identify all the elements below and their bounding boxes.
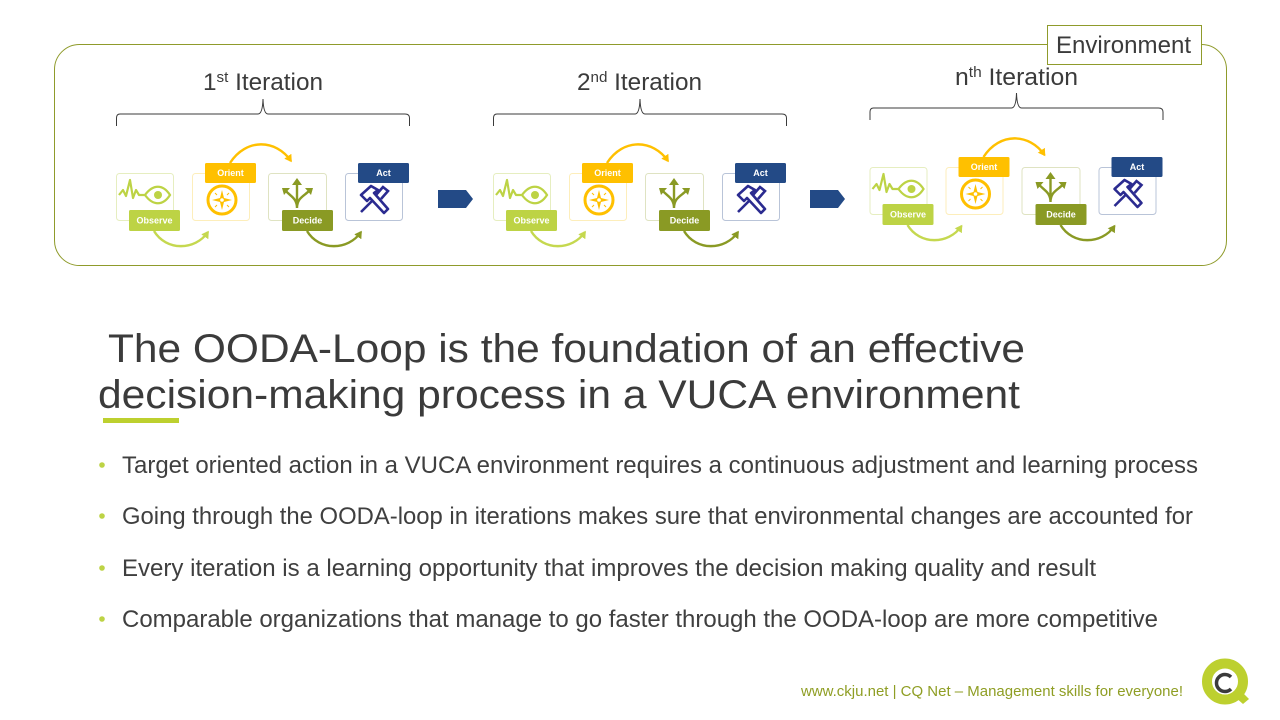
title [98,327,1025,417]
heading: 1st iteration: Iteration [228,69,323,96]
diagram: nth OODA loop [870,138,1162,240]
bullet list: Going through the OODA-loop in iterations makes sure that environmental changes are accounted for [122,503,1193,530]
title: The OODA-Loop is the foundation of an effective [108,327,1025,371]
heading: nth iteration: n [955,64,968,91]
bracket: nth iteration [870,93,1163,120]
heading: nth iteration: th [969,64,982,81]
heading: nth iteration: Iteration [982,64,1078,91]
bracket: 2nd iteration [494,99,786,126]
diagram: 1st OODA loop: Act [376,168,391,178]
bullet list [99,452,1198,633]
diagram: nth OODA loop: Observe [890,210,926,220]
diagram: 2nd OODA loop [494,144,786,246]
heading: 1st iteration: 1 [203,69,216,96]
diagram: 2nd OODA loop: Orient [594,168,621,178]
bullet list: Comparable organizations that manage to go faster through the OODA-loop are more competitive [122,606,1158,633]
diagram: 1st OODA loop: Observe [136,216,173,226]
bullet list: Target oriented action in a VUCA environment requires a continuous adjustment and learning process [122,452,1198,479]
panel: environment [54,26,1226,266]
arrow: to 2nd iteration [438,190,473,208]
diagram: nth OODA loop: Orient [971,162,997,172]
diagram: 2nd OODA loop: Act [753,168,768,178]
arrow: to nth iteration [810,190,845,208]
title: decision-making process in a VUCA environment [98,373,1020,417]
diagram: 1st OODA loop [116,144,409,246]
diagram: 1st OODA loop: Decide [293,216,322,226]
title underline [103,418,179,423]
heading: 2nd iteration: 2 [577,69,590,96]
diagram: 2nd OODA loop: Decide [670,216,699,226]
diagram: nth OODA loop: Act [1130,162,1144,172]
footer text: www.ckju.net | CQ Net – Management skills for everyone! [800,684,1183,700]
heading: 1st iteration: st [217,69,229,86]
bullet list: Every iteration is a learning opportunity that improves the decision making quality and result [122,555,1096,582]
diagram: nth OODA loop: Decide [1046,210,1076,220]
heading: 2nd iteration: Iteration [607,69,702,96]
label: environment [1048,26,1202,64]
label: environment: Environment [1056,32,1191,59]
logo: CQ [1207,664,1249,704]
diagram: 1st OODA loop: Orient [217,168,244,178]
heading: 2nd iteration: nd [591,69,607,86]
bracket: 1st iteration [116,99,410,126]
diagram: 2nd OODA loop: Observe [513,216,550,226]
